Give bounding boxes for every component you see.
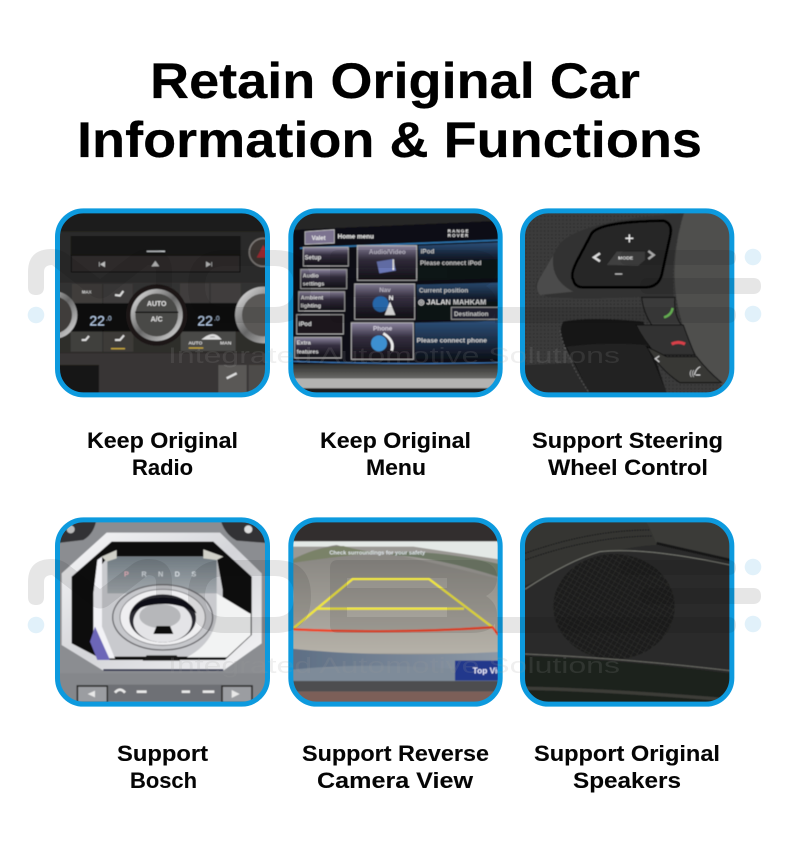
panel: keep original menu photo: Destination — [454, 311, 489, 318]
panel: keep original menu photo: N — [389, 295, 394, 302]
label: support reverse camera view: Support Reverse — [302, 741, 489, 766]
label: keep original menu: Menu — [366, 455, 426, 480]
label: support reverse camera view — [302, 741, 489, 793]
label: keep original radio — [87, 428, 238, 480]
panel: gear selector photo: N — [158, 569, 163, 578]
title: Information & Functions — [77, 112, 702, 168]
panel: keep original menu photo: Nav — [379, 287, 391, 294]
title: Retain Original Car — [150, 53, 640, 109]
panel: keep original radio photo: AUTO — [188, 340, 202, 346]
panel: keep original radio photo: AUTO — [147, 301, 167, 308]
label: support steering wheel control: Support Steering — [532, 428, 723, 453]
panel: gear selector photo — [55, 517, 272, 707]
panel: keep original menu photo: ◎ JALAN MAHKAM — [418, 298, 486, 307]
panel: keep original radio photo: A/C — [151, 316, 163, 323]
panel: keep original menu photo: Setup — [305, 255, 322, 261]
panel: keep original menu photo: Audio — [303, 273, 319, 279]
label: support original speakers: Support Original — [534, 741, 720, 766]
label: support bosch: Support — [117, 741, 209, 766]
label: support original speakers: Speakers — [573, 768, 681, 793]
label: support steering wheel control: Wheel Control — [548, 455, 708, 480]
watermark: upper logo — [28, 249, 761, 368]
label: support steering wheel control — [532, 428, 723, 480]
panel: keep original radio photo — [55, 208, 270, 398]
title — [77, 53, 702, 168]
panel: keep original menu photo: features — [297, 350, 319, 356]
label: keep original menu — [320, 428, 471, 480]
panel: keep original menu photo: iPod — [421, 248, 435, 255]
label: keep original radio: Radio — [132, 455, 193, 480]
panel: keep original menu photo: RANGE — [448, 228, 469, 233]
panel: steering wheel control photo: MODE — [618, 255, 634, 261]
label: keep original menu: Keep Original — [320, 428, 471, 453]
panel: keep original menu photo: Phone — [373, 326, 393, 333]
panel: keep original menu photo: settings — [303, 281, 324, 287]
panel: reverse camera view photo — [288, 517, 509, 708]
panel: steering wheel control photo: (( — [689, 369, 695, 378]
label: support bosch: Bosch — [130, 768, 197, 793]
panel: gear selector photo: R — [141, 569, 147, 578]
watermark: upper logo: Integrated Automotive Solutions — [168, 343, 620, 368]
watermark: lower logo: Integrated Automotive Solutions — [168, 653, 620, 678]
panel: keep original menu photo: Please connect iPod — [420, 260, 482, 267]
panel: keep original menu photo: Valet — [312, 236, 326, 242]
panel: steering wheel control photo — [520, 208, 737, 400]
panel: keep original radio photo: MAX — [82, 290, 92, 295]
panel: keep original menu photo: Please connect phone — [417, 337, 487, 344]
panel: keep original menu photo — [288, 208, 505, 398]
panel: reverse camera view photo: Top View — [473, 665, 509, 675]
panel: keep original menu photo: Home menu — [338, 233, 374, 240]
panel: keep original menu photo: Current position — [419, 288, 468, 295]
panel: keep original radio photo: .0 — [106, 316, 112, 323]
panel: gear selector photo: D — [175, 569, 180, 578]
panel: keep original menu photo: Ambient — [301, 295, 323, 301]
panel: keep original menu photo: Extra — [297, 341, 312, 347]
label: support reverse camera view: Camera View — [317, 768, 474, 793]
panel: original speakers photo — [520, 517, 737, 707]
panel: reverse camera view photo: Check surroundings for your safety — [329, 551, 426, 557]
panel: gear selector photo: S — [191, 569, 196, 578]
panel: gear selector photo: P — [124, 569, 129, 578]
watermark: lower logo — [28, 559, 761, 678]
label: keep original radio: Keep Original — [87, 428, 238, 453]
label: support bosch — [117, 741, 209, 793]
panel: keep original radio photo: MAN — [220, 340, 232, 346]
panel: keep original menu photo: lighting — [301, 304, 322, 310]
panel: keep original menu photo: Audio/Video — [369, 249, 406, 256]
panel: keep original radio photo: 22 — [197, 312, 213, 328]
panel: keep original menu photo: iPod — [299, 322, 312, 328]
label: support original speakers — [534, 741, 720, 793]
panel: keep original radio photo: .0 — [214, 316, 220, 323]
panel: keep original menu photo: ROVER — [448, 233, 469, 238]
panel: keep original radio photo: 22 — [89, 312, 105, 328]
